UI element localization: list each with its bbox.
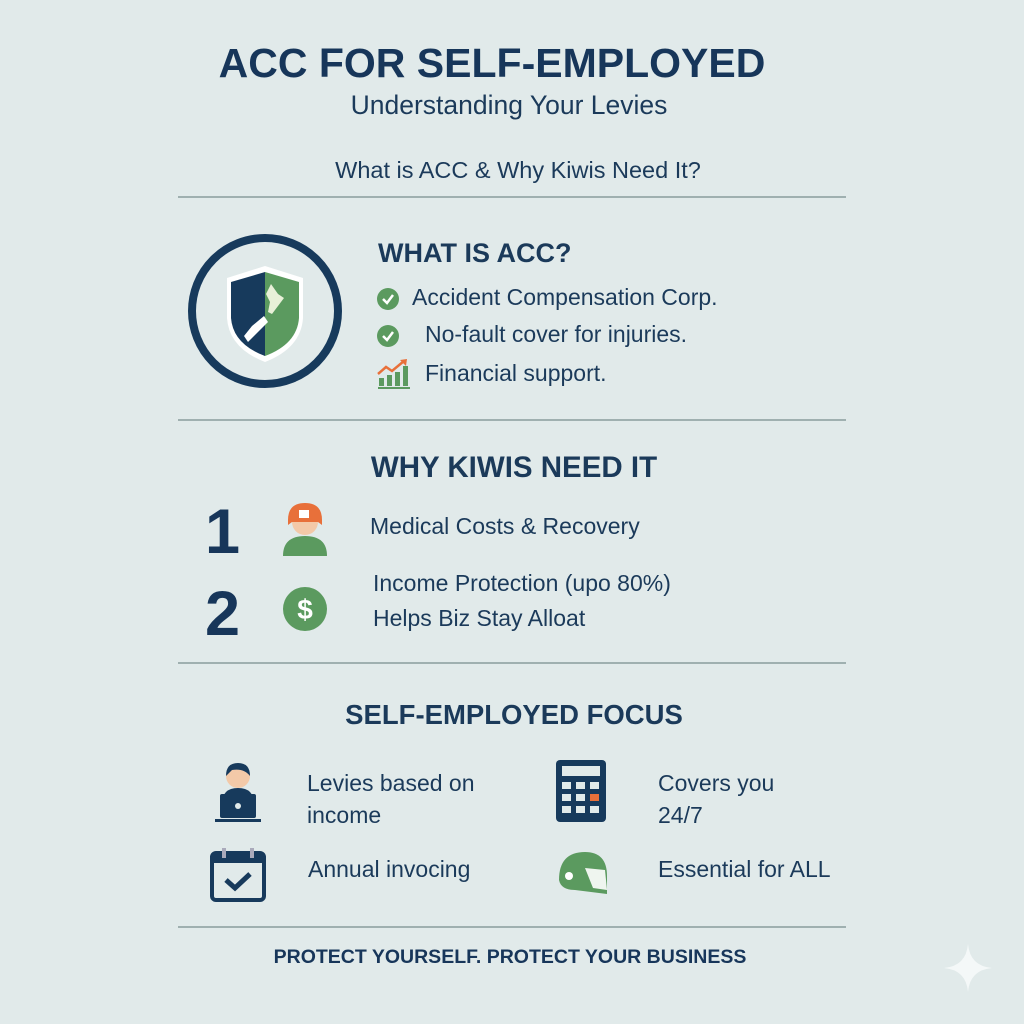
text: covers you 24/7 <box>658 770 774 828</box>
text: annual invoicing: Annual invocing <box>308 856 470 882</box>
title: ACC FOR SELF-EMPLOYED <box>219 40 765 86</box>
text: levies based on income <box>307 770 475 828</box>
item: accident compensation: Accident Compensation Corp. <box>412 284 718 310</box>
heading: why kiwis need it: WHY KIWIS NEED IT <box>371 451 657 484</box>
icon: helmet <box>559 852 607 894</box>
icon: calendar check <box>210 848 266 902</box>
icon: person with laptop <box>215 763 261 822</box>
item: no-fault cover: No-fault cover for injuries. <box>425 321 687 347</box>
item: financial support: Financial support. <box>425 360 607 386</box>
text: covers you 24/7: Covers you <box>658 770 774 796</box>
number 2: 2 <box>205 579 240 649</box>
text: levies based on income: income <box>307 802 381 828</box>
icon: sparkle <box>946 946 990 990</box>
icon: dollar coin: $ <box>297 594 313 625</box>
icon: shield emblem <box>188 234 342 388</box>
item: financial support <box>377 359 607 389</box>
icon: calculator <box>556 760 606 822</box>
number 1: 1 <box>205 497 240 567</box>
icon: worker <box>283 503 327 556</box>
text: income protection: Helps Biz Stay Alloat <box>373 605 585 631</box>
text: income protection <box>373 570 671 631</box>
section intro heading: What is ACC & Why Kiwis Need It? <box>335 157 701 183</box>
footer tagline: PROTECT YOURSELF. PROTECT YOUR BUSINESS <box>274 946 746 968</box>
text: levies based on income: Levies based on <box>307 770 475 796</box>
icon: dollar coin <box>283 587 327 631</box>
panel: what is ACC <box>377 238 718 389</box>
subtitle: Understanding Your Levies <box>351 90 667 120</box>
heading: self-employed focus: SELF-EMPLOYED FOCUS <box>345 699 683 730</box>
text: medical costs: Medical Costs & Recovery <box>370 513 640 539</box>
heading: what is ACC: WHAT IS ACC? <box>378 238 571 268</box>
text: essential for all: Essential for ALL <box>658 856 831 882</box>
text: covers you 24/7: 24/7 <box>658 802 703 828</box>
text: income protection: Income Protection (upo 80%) <box>373 570 671 596</box>
